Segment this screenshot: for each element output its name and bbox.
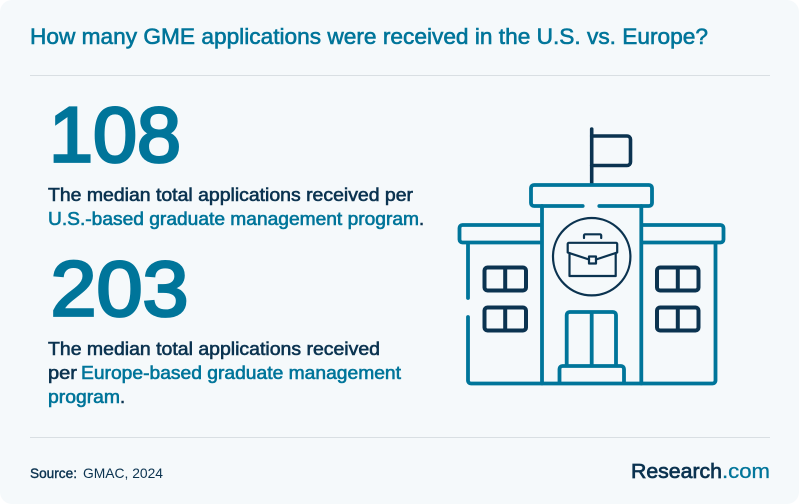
source note: Source: — [30, 465, 77, 481]
statistic: U.S. — [48, 91, 424, 229]
number: 203: 203 — [50, 245, 188, 333]
text block: Europe description: program — [48, 386, 120, 407]
text block: U.S. description: The median total applications received per — [48, 184, 413, 205]
text block: U.S. description — [48, 184, 424, 229]
statistic: Europe — [48, 245, 401, 407]
text block: Europe description: The median total applications received — [48, 338, 380, 359]
number: 108: 108 — [49, 91, 181, 179]
logo: Research.com — [631, 460, 770, 483]
icon: school building with flag and briefcase — [460, 129, 724, 384]
text block: Europe description: . — [120, 386, 125, 407]
logo: Research.com: .com — [722, 460, 770, 483]
icon: briefcase in circle — [553, 218, 630, 295]
text block: U.S. description: U.S.-based graduate management program — [48, 208, 419, 229]
icon: flag — [592, 129, 630, 183]
logo: Research.com: Research — [631, 460, 722, 483]
icon: building outline — [460, 185, 724, 384]
source note — [30, 465, 163, 481]
text block: Europe description — [48, 338, 401, 407]
icon: windows — [484, 268, 698, 330]
text block: Europe description: Europe-based graduate management — [81, 362, 401, 383]
text block: Europe description: per — [48, 362, 77, 383]
title: How many GME applications were received in the U.S. vs. Europe? — [30, 24, 708, 49]
source note: GMAC, 2024 — [83, 465, 163, 481]
text block: U.S. description: . — [419, 208, 424, 229]
